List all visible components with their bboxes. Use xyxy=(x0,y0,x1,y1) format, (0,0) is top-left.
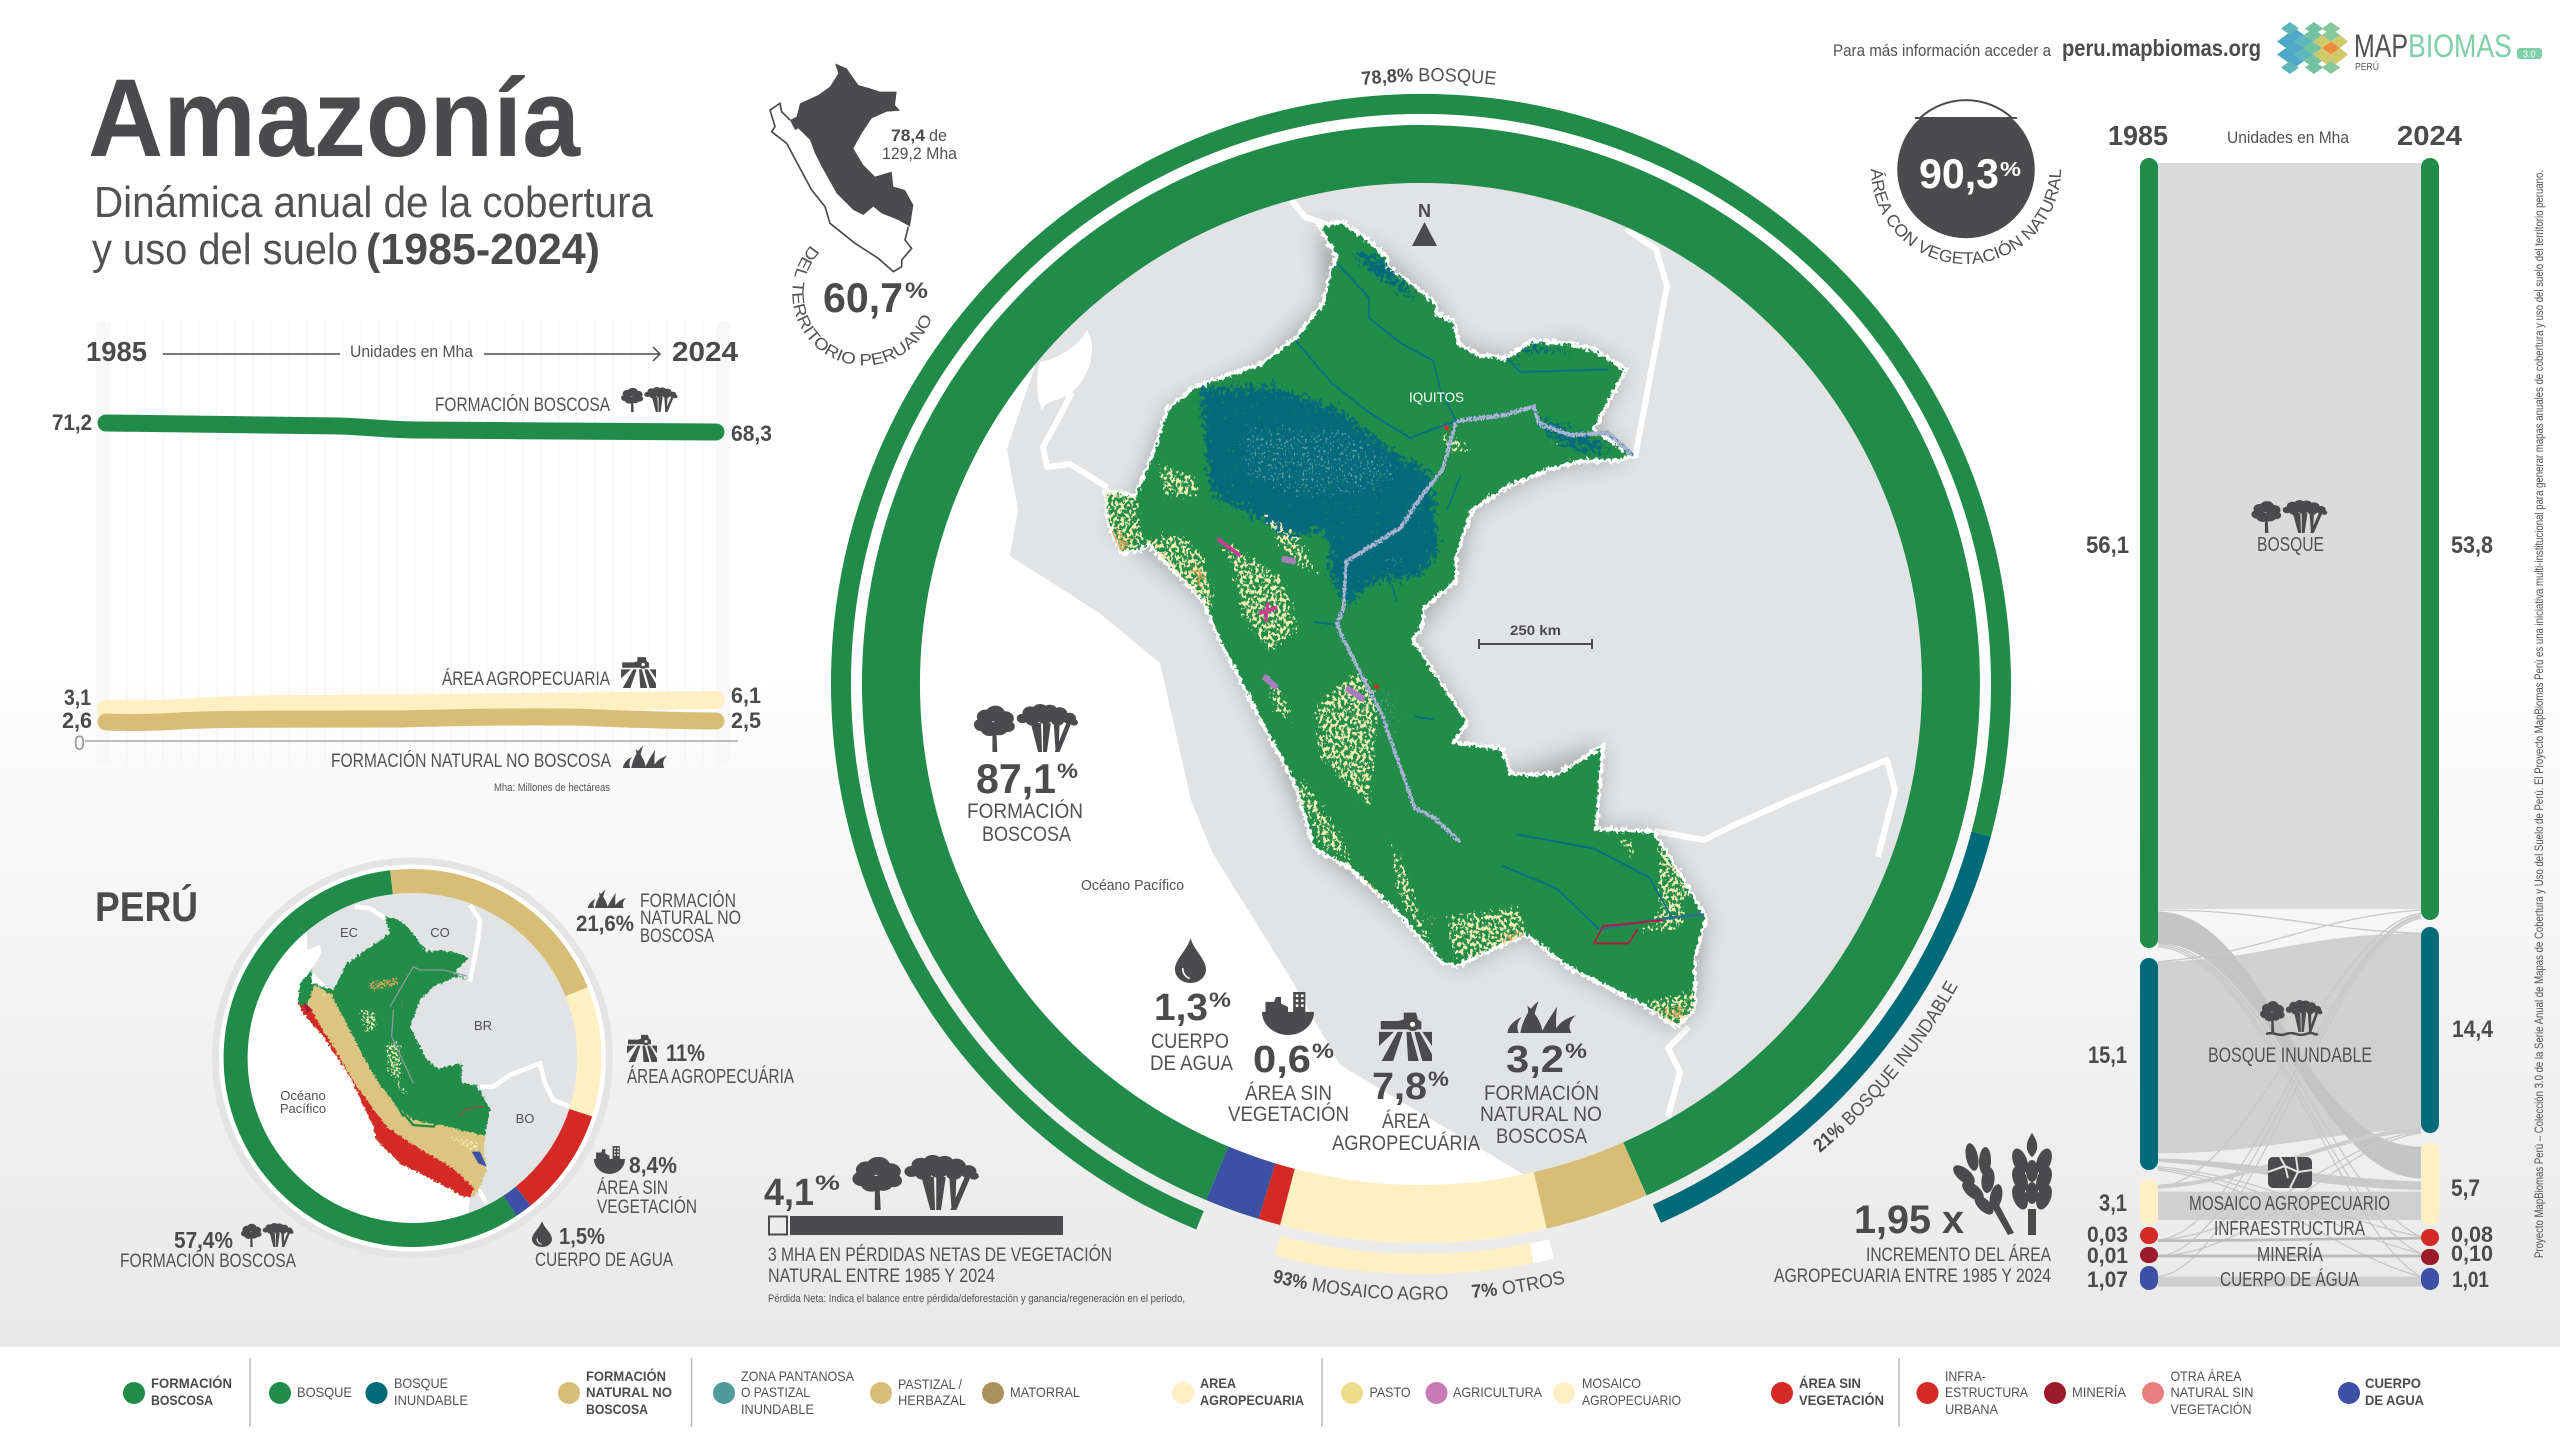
stat: area agropecuaria xyxy=(1332,1013,1480,1155)
rivers xyxy=(1273,263,1672,929)
ring: land cover xyxy=(891,154,1951,1214)
stat: area sin vegetacion: VEGETACIÓN xyxy=(1228,1103,1349,1126)
main donut: amazon xyxy=(830,68,2012,1300)
series values: 68,3 xyxy=(731,421,772,446)
legend: otra area natural xyxy=(2142,1368,2254,1417)
callout: formacion boscosa xyxy=(120,1223,296,1272)
sankey class: mineria: MINERÍA xyxy=(2257,1243,2324,1266)
legend: formacion natural no boscosa: NATURAL NO xyxy=(586,1384,672,1400)
stat: cuerpo de agua: DE AGUA xyxy=(1150,1052,1233,1075)
callout: formacion natural no boscosa: BOSCOSA xyxy=(640,926,714,947)
callout: cuerpo de agua: 1,5% xyxy=(559,1223,605,1249)
legend: mineria xyxy=(2044,1382,2127,1404)
badge: natural vegetation: 90,3 xyxy=(1919,150,1999,197)
sankey values 2024: 0,10 xyxy=(2451,1241,2493,1266)
label: area agropecuaria xyxy=(442,657,656,690)
mini map xyxy=(298,893,578,1213)
stat: formacion boscosa: 87,1 xyxy=(976,755,1056,802)
stat: formacion natural no boscosa: FORMACIÓN xyxy=(1484,1082,1599,1105)
legend: cuerpo de agua: DE AGUA xyxy=(2365,1392,2424,1408)
area text xyxy=(882,126,958,163)
sankey flows xyxy=(2158,163,2421,1287)
legend: infraestructura urbana xyxy=(1916,1368,2029,1417)
legend: bosque xyxy=(269,1382,352,1404)
legend: otra area natural: OTRA ÁREA xyxy=(2170,1368,2242,1384)
agriculture patches xyxy=(1100,421,1697,1027)
stat: cuerpo de agua: 1,3 xyxy=(1154,987,1208,1029)
country borders xyxy=(1043,200,1895,1117)
legend: cuerpo de agua: CUERPO xyxy=(2365,1375,2421,1391)
city label: iquitos: IQUITOS xyxy=(1409,389,1464,405)
mini map place labels: BR xyxy=(474,1018,492,1033)
area text: 78,4 xyxy=(891,126,926,145)
peru silhouette: share of national territory xyxy=(769,63,958,366)
stat: area sin vegetacion: ÁREA SIN xyxy=(1245,1082,1332,1105)
sankey values 1985: 15,1 xyxy=(2088,1042,2127,1069)
legend: matorral: MATORRAL xyxy=(1010,1384,1080,1400)
label: formacion boscosa xyxy=(435,387,677,416)
sankey class: bosque: BOSQUE xyxy=(2257,534,2324,556)
sankey class: bosque inundable: BOSQUE INUNDABLE xyxy=(2208,1044,2372,1067)
stat: area sin vegetacion: % xyxy=(1312,1040,1334,1063)
sankey class: cuerpo de agua: CUERPO DE ÁGUA xyxy=(2220,1268,2359,1291)
callout: net losses: 3 MHA EN PÉRDIDAS NETAS DE VEGETACIÓN xyxy=(768,1244,1112,1266)
callout: formacion natural no boscosa: FORMACIÓN xyxy=(640,890,736,912)
mini map place labels xyxy=(280,925,534,1126)
header: more information: Para más información acceder a xyxy=(1833,41,2051,60)
title: Amazonía xyxy=(88,57,581,180)
callout: formacion boscosa: 57,4% xyxy=(174,1227,233,1253)
series values: 2,6 xyxy=(62,708,92,733)
legend: mosaico agropecuario xyxy=(1553,1375,1681,1408)
logo: mapbiomas xyxy=(2277,22,2542,74)
sankey heading xyxy=(2108,120,2462,151)
sankey values 1985: 0,03 xyxy=(2087,1222,2128,1247)
chart heading: 2024 xyxy=(672,336,738,367)
sankey values 1985: 3,1 xyxy=(2099,1190,2127,1217)
legend: area sin vegetacion: VEGETACIÓN xyxy=(1799,1391,1884,1408)
line chart: dynamics 1985-2024 xyxy=(52,321,772,794)
map: amazon land cover xyxy=(1100,222,1707,1027)
mini map place labels: EC xyxy=(340,925,358,940)
legend xyxy=(123,1358,2424,1427)
legend: zona pantanosa xyxy=(713,1368,855,1417)
legend: zona pantanosa: INUNDABLE xyxy=(741,1401,814,1417)
subtitle xyxy=(92,178,653,274)
header: more information: peru.mapbiomas.org xyxy=(2062,35,2261,61)
label: formacion boscosa: FORMACIÓN BOSCOSA xyxy=(435,394,610,416)
sankey values 2024: 0,08 xyxy=(2451,1222,2493,1247)
gray land xyxy=(1007,183,1922,1174)
legend: area sin vegetacion xyxy=(1771,1375,1884,1408)
sankey chart xyxy=(2086,120,2494,1292)
legend: pasto: PASTO xyxy=(1370,1384,1411,1400)
sankey values 1985 xyxy=(2086,532,2129,1292)
series: area agropecuaria xyxy=(106,700,716,709)
legend: agricultura xyxy=(1426,1382,1543,1404)
logo: mapbiomas: MAP xyxy=(2354,28,2408,64)
disc: ocean xyxy=(920,183,1922,1185)
sankey nodes 1985 xyxy=(2140,158,2158,1290)
title block xyxy=(88,57,653,274)
header: more information xyxy=(1833,35,2261,61)
stat: area agropecuaria: ÁREA xyxy=(1382,1110,1430,1133)
legend: otra area natural: VEGETACIÓN xyxy=(2170,1401,2252,1417)
subtitle: Dinámica anual de la cobertura xyxy=(94,178,653,227)
flooded forest region xyxy=(1197,384,1442,613)
stat: area sin vegetacion: 0,6 xyxy=(1253,1039,1311,1081)
north arrow xyxy=(1412,201,1437,246)
stat: area agropecuaria: % xyxy=(1428,1068,1449,1091)
stat: area sin vegetacion xyxy=(1228,992,1349,1126)
axis: 0 xyxy=(74,732,85,755)
legend: area agropecuaria: AGROPECUARIA xyxy=(1200,1392,1304,1408)
callout: area sin vegetacion: VEGETACIÓN xyxy=(597,1196,697,1218)
legend: bosque: BOSQUE xyxy=(297,1384,352,1400)
series: formacion natural no boscosa xyxy=(106,717,716,723)
legend: mosaico agropecuario: AGROPECUARIO xyxy=(1582,1392,1681,1408)
legend: pastizal: PASTIZAL / xyxy=(898,1376,962,1392)
subtitle: y uso del suelo xyxy=(92,225,358,274)
version badge: 3.0 xyxy=(2523,49,2536,59)
legend: bosque inundable xyxy=(366,1375,468,1408)
sankey values 2024 xyxy=(2451,532,2494,1292)
callout: agri increase: INCREMENTO DEL ÁREA xyxy=(1866,1245,2051,1266)
callout: area sin vegetacion: 8,4% xyxy=(629,1152,677,1178)
main map xyxy=(1007,183,1922,1174)
legend: otra area natural: NATURAL SIN xyxy=(2170,1384,2254,1400)
series values: 3,1 xyxy=(64,685,91,710)
stat: formacion natural no boscosa xyxy=(1480,1001,1602,1148)
curved label: bosque: 78,8% BOSQUE xyxy=(1361,68,1496,86)
legend: pasto xyxy=(1341,1382,1411,1404)
donut: peru land cover xyxy=(236,881,589,1235)
callout: cuerpo de agua: CUERPO DE AGUA xyxy=(535,1250,673,1271)
callout: area agropecuaria xyxy=(627,1035,794,1088)
legend: zona pantanosa: O PASTIZAL xyxy=(741,1384,810,1400)
sankey class: bosque inundable xyxy=(2208,1000,2372,1067)
legend: cuerpo de agua xyxy=(2338,1375,2424,1408)
callout: net losses: % xyxy=(815,1172,840,1195)
sankey nodes 2024 xyxy=(2421,158,2439,1290)
stat: formacion natural no boscosa: % xyxy=(1565,1040,1587,1063)
legend: area agropecuaria xyxy=(1172,1375,1304,1408)
mini map place labels: Pacífico xyxy=(280,1101,326,1116)
icon: logo diamonds xyxy=(2277,22,2348,74)
legend: pastizal xyxy=(870,1376,966,1408)
stat: area agropecuaria: 7,8 xyxy=(1372,1066,1427,1108)
stat: formacion natural no boscosa: 3,2 xyxy=(1506,1039,1564,1081)
callout: agri increase xyxy=(1774,1133,2055,1287)
legend: formacion boscosa: BOSCOSA xyxy=(151,1392,213,1408)
stat: cuerpo de agua: % xyxy=(1209,989,1231,1012)
stat: formacion natural no boscosa: NATURAL NO xyxy=(1480,1103,1602,1126)
sankey class: infraestructura: INFRAESTRUCTURA xyxy=(2214,1218,2366,1240)
percent: 60,7 xyxy=(823,274,903,321)
series values xyxy=(52,410,772,733)
callout: net losses: NATURAL ENTRE 1985 Y 2024 xyxy=(768,1266,995,1287)
legend: formacion boscosa: FORMACIÓN xyxy=(151,1374,232,1391)
callout: area sin vegetacion xyxy=(594,1146,697,1218)
legend: formacion natural no boscosa: BOSCOSA xyxy=(586,1401,648,1417)
stat: formacion boscosa: BOSCOSA xyxy=(982,823,1071,846)
series values: 6,1 xyxy=(731,683,761,708)
legend: pastizal: HERBAZAL xyxy=(898,1392,966,1408)
series values: 71,2 xyxy=(52,410,92,435)
legend: formacion natural no boscosa: FORMACIÓN xyxy=(586,1367,666,1384)
scale bar: 250 km xyxy=(1510,622,1561,638)
version badge xyxy=(2517,48,2542,59)
curved label: mosaico agro: 93% MOSAICO AGRO xyxy=(1274,1270,1448,1300)
chart heading: 1985 xyxy=(86,336,147,367)
legend: area sin vegetacion: ÁREA SIN xyxy=(1799,1375,1861,1391)
curved label: otros: 7% OTROS xyxy=(1472,1271,1564,1298)
outer halo ring xyxy=(216,861,610,1255)
heading: peru: PERÚ xyxy=(95,882,198,930)
sankey heading: Unidades en Mha xyxy=(2227,128,2349,147)
mini map place labels: BO xyxy=(516,1111,534,1126)
stat: formacion boscosa: FORMACIÓN xyxy=(967,800,1083,823)
callout: net losses: 4,1 xyxy=(764,1172,814,1214)
sankey values 2024: 5,7 xyxy=(2451,1175,2480,1202)
area text: 129,2 Mha xyxy=(882,144,958,163)
callout: area sin vegetacion: ÁREA SIN xyxy=(597,1178,668,1199)
callout: area agropecuaria: 11% xyxy=(666,1040,705,1067)
legend: matorral xyxy=(982,1382,1080,1404)
callout: cuerpo de agua xyxy=(532,1221,673,1271)
legend: zona pantanosa: ZONA PANTANOSA xyxy=(741,1368,855,1384)
callout: agri increase: AGROPECUARIA ENTRE 1985 Y 2024 xyxy=(1774,1266,2051,1287)
sankey values 1985: 56,1 xyxy=(2086,532,2129,559)
sankey heading: 1985 xyxy=(2108,120,2168,151)
area text: de xyxy=(929,126,947,145)
label: area agropecuaria: ÁREA AGROPECUARIA xyxy=(442,669,610,690)
map shadow xyxy=(1107,226,1707,1027)
mini map place labels: Océano xyxy=(280,1088,326,1103)
panel: peru mini map xyxy=(95,850,794,1283)
legend: bosque inundable: BOSQUE xyxy=(394,1375,448,1391)
series: formacion boscosa xyxy=(106,423,716,432)
legend: mineria: MINERÍA xyxy=(2072,1384,2127,1400)
subtitle: (1985-2024) xyxy=(366,225,600,274)
legend: infraestructura urbana: INFRA- xyxy=(1945,1368,1986,1384)
gulf xyxy=(1037,330,1092,410)
curved caption: DEL TERRITORIO PERUANO xyxy=(792,246,930,366)
sankey class: mosaico agropecuario xyxy=(2189,1157,2390,1215)
sankey values 2024: 53,8 xyxy=(2451,532,2493,559)
ocean label: Océano Pacífico xyxy=(1081,877,1184,894)
legend: formacion natural no boscosa xyxy=(558,1367,672,1417)
ring: subclasses xyxy=(841,104,2001,1264)
curved label: bosque inundable: 21% BOSQUE INUNDABLE xyxy=(1813,980,1958,1153)
stat: formacion natural no boscosa: BOSCOSA xyxy=(1496,1125,1587,1148)
stat: cuerpo de agua xyxy=(1150,938,1233,1075)
sankey values 2024: 14,4 xyxy=(2452,1016,2494,1043)
legend: bosque inundable: INUNDABLE xyxy=(394,1392,468,1408)
callout: formacion natural no boscosa xyxy=(576,890,741,947)
mini map place labels: CO xyxy=(430,925,450,940)
legend: area agropecuaria: AREA xyxy=(1200,1375,1236,1391)
sankey values 2024: 1,01 xyxy=(2452,1267,2489,1292)
logo: mapbiomas: PERÚ xyxy=(2355,60,2379,73)
callout: agri increase: 1,95 x xyxy=(1854,1198,1964,1242)
icon: peru map xyxy=(770,63,913,272)
sankey class: mosaico agropecuario: MOSAICO AGROPECUARIO xyxy=(2189,1193,2390,1215)
badge: natural vegetation: % xyxy=(2000,159,2021,181)
chart heading xyxy=(86,336,738,367)
legend: formacion boscosa xyxy=(123,1374,232,1408)
sankey heading: 2024 xyxy=(2397,120,2462,151)
scale bar xyxy=(1479,622,1592,649)
legend: mosaico agropecuario: MOSAICO xyxy=(1582,1375,1641,1391)
badge: natural vegetation: ÁREA CON VEGETACIÓN NATURAL xyxy=(1870,168,2062,264)
sankey values 1985: 0,01 xyxy=(2087,1243,2128,1268)
legend: agricultura: AGRICULTURA xyxy=(1453,1384,1543,1400)
chart heading: Unidades en Mha xyxy=(350,342,473,361)
callout: area agropecuaria: ÁREA AGROPECUÁRIA xyxy=(627,1065,794,1088)
series values: 2,5 xyxy=(731,708,761,733)
percent: % xyxy=(905,278,928,303)
icon: wheat xyxy=(1950,1133,2055,1235)
stat: formacion boscosa xyxy=(967,704,1083,846)
proportion bar xyxy=(769,1216,1063,1235)
callout: net losses xyxy=(764,1155,1185,1305)
north arrow: N xyxy=(1418,201,1431,221)
footer band xyxy=(0,1347,2560,1438)
stat: formacion boscosa: % xyxy=(1057,760,1078,783)
stat: area agropecuaria: AGROPECUÁRIA xyxy=(1332,1132,1480,1155)
badge: natural vegetation xyxy=(1870,99,2062,264)
callout: formacion boscosa: FORMACIÓN BOSCOSA xyxy=(120,1250,296,1272)
icon: trees xyxy=(852,1155,979,1210)
legend: infraestructura urbana: URBANA xyxy=(1945,1401,1999,1417)
callout: formacion natural no boscosa: 21,6% xyxy=(576,911,634,936)
logo: mapbiomas: BIOMAS xyxy=(2408,28,2512,64)
stat: cuerpo de agua: CUERPO xyxy=(1151,1030,1229,1053)
sankey values 1985: 1,07 xyxy=(2087,1267,2128,1292)
note: Mha: Millones de hectáreas xyxy=(494,782,610,794)
callout: formacion natural no boscosa: NATURAL NO xyxy=(640,908,741,929)
sankey class: bosque xyxy=(2251,500,2327,556)
label: formacion natural no boscosa: FORMACIÓN NATURAL NO BOSCOSA xyxy=(331,750,611,772)
legend: infraestructura urbana: ESTRUCTURA xyxy=(1945,1384,2029,1400)
callout: net losses: Pérdida Neta: Indica el balance entre pérdida/deforestación y ganancia/regeneración en el periodo, xyxy=(768,1293,1185,1305)
